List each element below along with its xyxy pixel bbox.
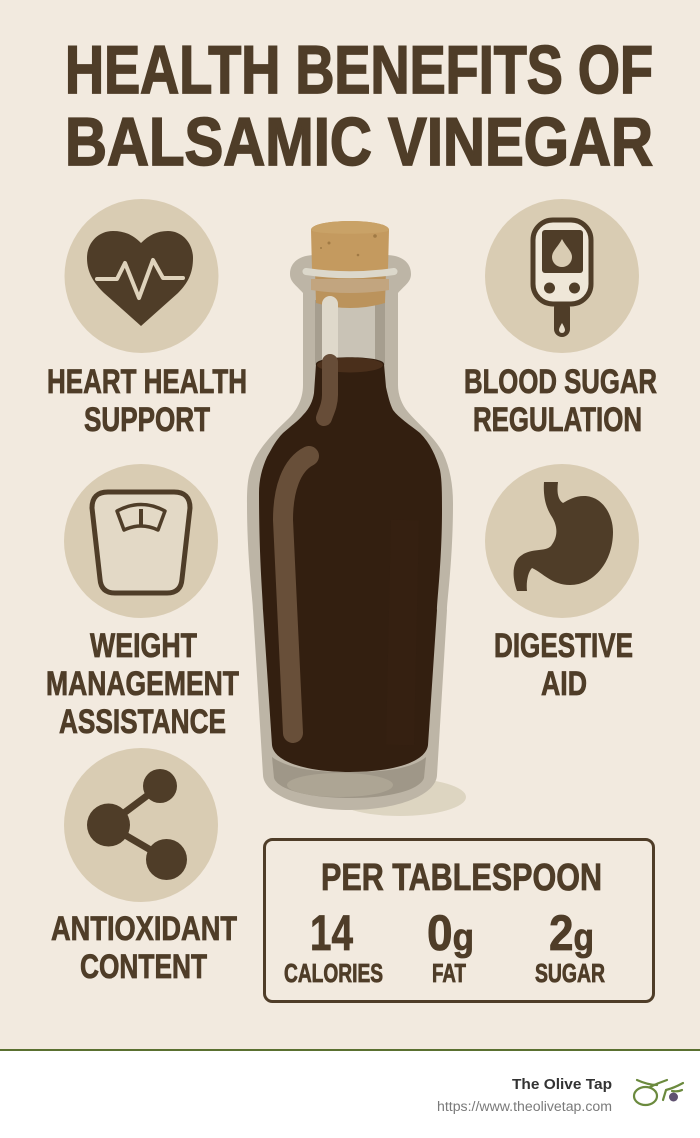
empty neck interior [315,300,385,365]
label: AID [541,665,587,703]
label: HEART HEALTH [47,363,247,401]
label: DIGESTIVE [494,627,633,665]
bottle illustration [247,221,466,816]
liquid surface [317,358,383,372]
stat: calories: CALORIES [284,958,383,988]
benefit: heart health support [47,199,247,439]
stat: fat: FAT [432,958,466,988]
stat: calories: 14 [310,905,353,961]
icon: stomach [485,464,639,618]
panel heading: PER TABLESPOON [321,857,602,899]
icon: molecule [64,748,218,902]
label: ASSISTANCE [59,703,226,741]
label: WEIGHT [90,627,197,665]
label: ANTIOXIDANT [51,910,237,948]
stat: sugar: SUGAR [535,958,605,988]
liquid reflections [324,362,330,418]
icon: olive branch logo [634,1080,683,1105]
footer url: https://www.theolivetap.com [437,1099,612,1114]
icon: bathroom scale [64,464,218,618]
benefit: blood sugar regulation [464,199,657,439]
stat: fat: 0g [427,905,474,961]
neck highlight [322,304,338,362]
stat: sugar: 2g [549,905,594,961]
icon: heart with pulse [64,199,218,353]
label [494,627,633,703]
stat: sugar [535,905,605,988]
label [51,910,237,986]
balsamic liquid [259,357,442,772]
footer [0,1049,700,1138]
bottle base [272,757,426,798]
footer brand name: The Olive Tap [512,1077,612,1093]
lip band over cork [311,279,389,293]
label: REGULATION [473,401,642,439]
stat: fat [427,905,474,988]
label: SUPPORT [84,401,210,439]
icon: glucose meter [485,199,639,353]
label: MANAGEMENT [46,665,239,703]
label [47,363,247,439]
benefit: digestive aid [485,464,639,703]
benefit: antioxidant content [51,748,237,986]
title [65,32,653,180]
cork [311,221,389,308]
label [46,627,239,741]
label [464,363,657,439]
benefit: weight management assistance [46,464,239,741]
glass body [247,255,453,810]
stat: calories [284,905,383,988]
panel: nutrition per tablespoon [264,840,654,1002]
label: CONTENT [80,948,207,986]
lip highlight [306,272,394,275]
bottle shadow [334,778,466,816]
